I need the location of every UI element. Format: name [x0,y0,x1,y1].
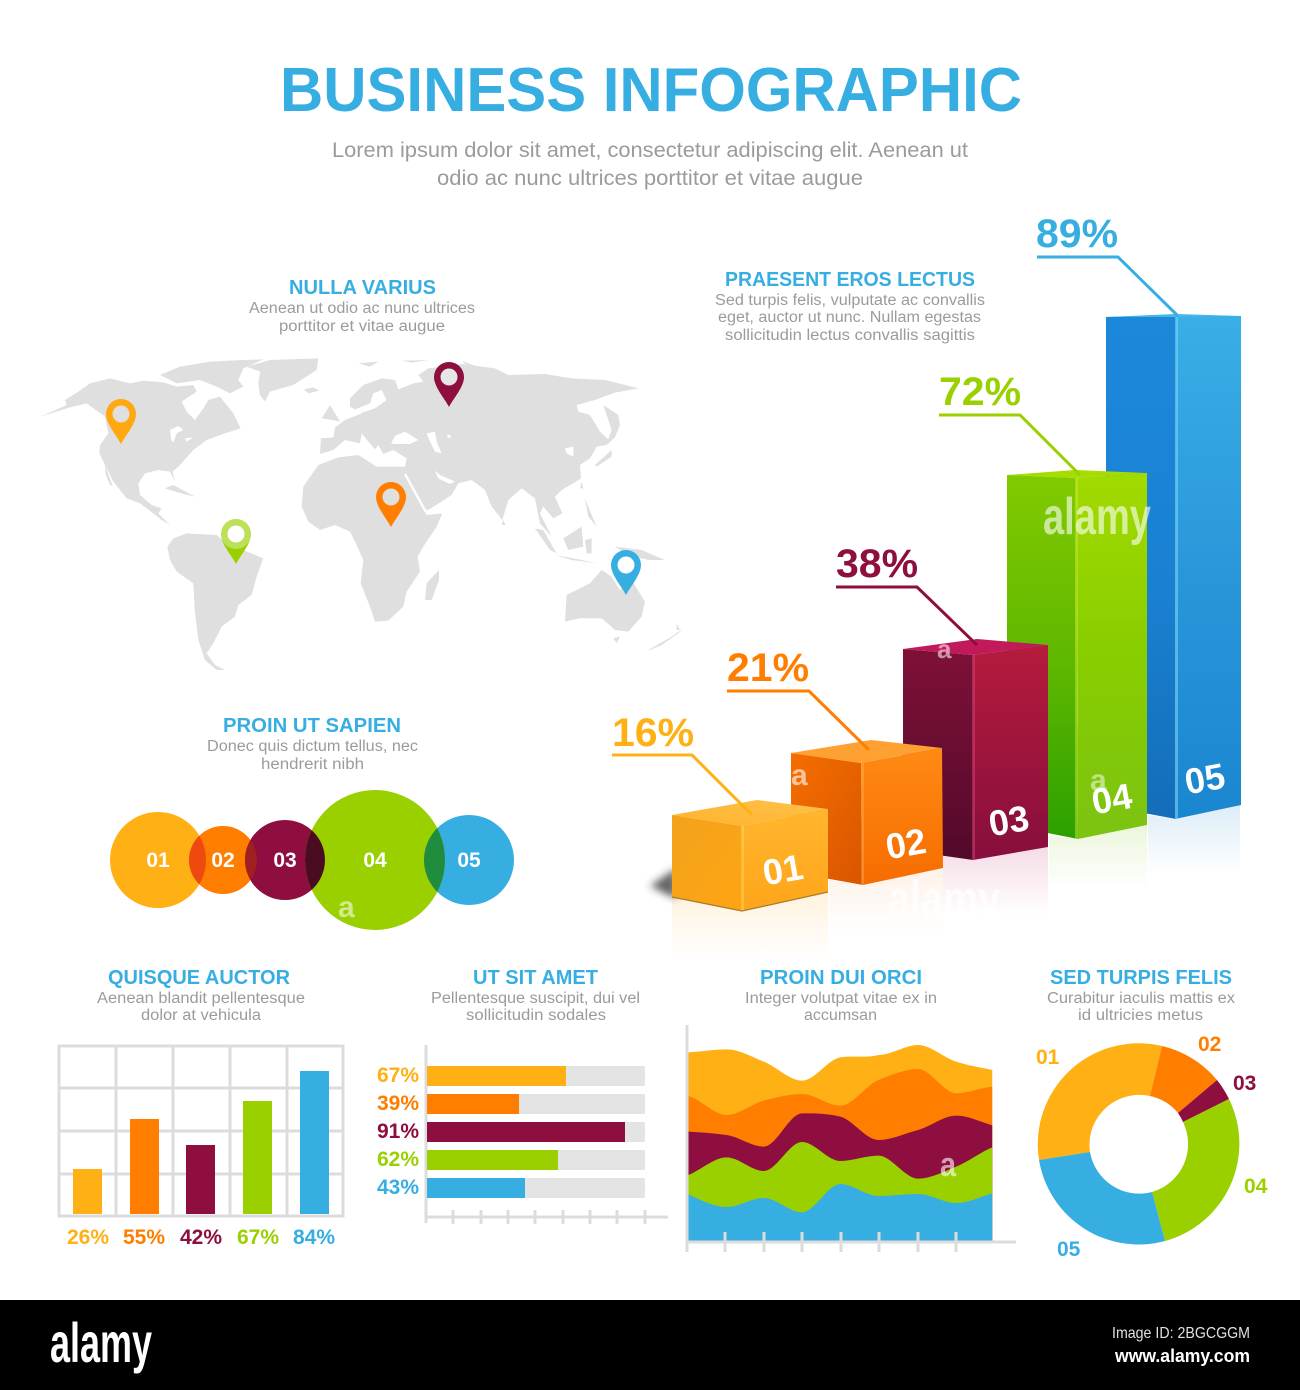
circle chart: 02 [211,849,235,872]
watermarks: a [338,891,355,924]
callout: 21%: 21% [727,646,809,690]
callout: 38% [836,542,977,645]
title: BUSINESS INFOGRAPHIC [280,56,1022,125]
horizontal bar chart: 91% [377,1120,419,1143]
3D bar 01 [672,800,828,911]
world map [41,358,683,670]
subtitle: odio ac nunc ultrices porttitor et vitae augue [437,166,863,190]
3D bar 03 [903,639,1048,860]
text block: stream chart description: accumsan [804,1007,877,1024]
text block: chart description: Sed turpis felis, vulputate ac convallis [715,292,985,309]
circle chart: 03 [273,849,297,872]
donut chart: 03 [1233,1072,1256,1095]
donut chart: 02 [1198,1033,1221,1056]
icon: blue map pin [611,550,641,595]
horizontal bar chart [377,1045,668,1224]
circle chart: 05 [457,849,481,872]
text block: circles description: hendrerit nibh [261,756,364,773]
bar reflections [672,805,1240,960]
circle chart [110,790,514,930]
text block: chart description [715,292,985,344]
footer url: www.alamy.com [1114,1346,1250,1366]
text block: map description: Aenean ut odio ac nunc ultrices [249,300,475,317]
circle chart: 01 [146,849,170,872]
stream area chart [687,1025,1016,1252]
callout: 16%: 16% [612,711,694,755]
text block: donut description: id ultricies metus [1078,1007,1203,1024]
text block: stream chart description: Integer volutpat vitae ex in [745,990,937,1007]
callout: 38%: 38% [836,542,918,586]
heading: praesent eros lectus: PRAESENT EROS LECTUS [725,269,975,291]
callout: 89%: 89% [1036,212,1118,256]
column chart: 42% [180,1226,222,1249]
horizontal bar chart: 43% [377,1176,419,1199]
footer bar [0,1300,1300,1390]
panel: world map [41,277,683,670]
text block: horizontal bars description: sollicitudin sodales [466,1007,606,1024]
heading: nulla varius: NULLA VARIUS [289,277,436,299]
3D bar 02 [791,740,943,885]
subtitle: Lorem ipsum dolor sit amet, consectetur adipiscing elit. Aenean ut [332,138,968,162]
text block: column chart description [97,990,305,1024]
text block: horizontal bars description [431,990,640,1024]
horizontal bar chart: 62% [377,1148,419,1171]
3D bar 05 [1106,314,1241,819]
panel: column chart [59,967,343,1249]
circle chart: 04 [363,849,387,872]
panel: 3D bar chart [612,212,1241,960]
heading: sed turpis felis: SED TURPIS FELIS [1050,967,1232,989]
heading: ut sit amet: UT SIT AMET [473,967,598,989]
text block: map description: porttitor et vitae augue [279,318,445,335]
heading: proin ut sapien: PROIN UT SAPIEN [223,715,401,737]
column chart: 55% [123,1226,165,1249]
text block: column chart description: dolor at vehicula [141,1007,261,1024]
icon: orange map pin [376,482,406,527]
icon: green map pin [221,519,251,564]
callout: 72%: 72% [939,370,1021,414]
callout: 89% [1036,212,1178,316]
bar number labels: 05 [1182,755,1228,802]
subtitle [332,138,968,190]
bar number labels: 01 [760,846,806,893]
text block: chart description: eget, auctor ut nunc. Nullam egestas [718,309,981,326]
callout: 16% [612,711,752,815]
panel: horizontal bars [377,967,668,1224]
bar number labels [760,755,1228,893]
bar number labels: 02 [883,820,929,867]
watermarks: a [937,634,952,664]
watermarks [338,488,1151,1184]
watermarks: a [791,759,808,792]
donut chart: 05 [1057,1238,1081,1261]
horizontal bar chart: 67% [377,1064,419,1087]
text block: circles description: Donec quis dictum tellus, nec [207,738,418,755]
heading: proin dui orci: PROIN DUI ORCI [760,967,922,989]
reflection watermark: alamy [888,871,1000,927]
panel: overlapping circles [110,715,514,930]
text block: circles description [207,738,418,773]
watermarks: a [940,1146,957,1184]
column chart: 84% [293,1226,335,1249]
horizontal bar chart: 39% [377,1092,419,1115]
column chart [59,1046,343,1249]
watermarks: a [1090,764,1107,797]
donut chart [1036,1033,1268,1261]
3D bar 04 [1007,470,1147,839]
donut chart: 04 [1244,1175,1268,1198]
panel: stream chart [687,967,1016,1252]
watermarks: alamy [1043,488,1151,546]
text block: map description [249,300,475,335]
text block: chart description: sollicitudin lectus convallis sagittis [725,327,975,344]
text block: horizontal bars description: Pellentesque suscipit, dui vel [431,990,640,1007]
donut chart: 01 [1036,1046,1060,1069]
heading: quisque auctor: QUISQUE AUCTOR [108,967,291,989]
text block: donut description: Curabitur iaculis mattis ex [1047,990,1235,1007]
text block: column chart description: Aenean blandit pellentesque [97,990,305,1007]
icon: maroon map pin [434,362,464,407]
column chart: 26% [67,1226,109,1249]
callout: 21% [727,646,869,750]
callout: 72% [939,370,1080,475]
icon: yellow map pin [106,399,136,444]
text block: donut description [1047,990,1235,1024]
footer logo: alamy [50,1311,152,1374]
column chart: 67% [237,1226,279,1249]
text block: stream chart description [745,990,937,1024]
bar number labels: 03 [986,797,1032,844]
footer image id: Image ID: 2BGCGGM [1112,1325,1250,1342]
panel: donut chart [1036,967,1268,1261]
bar number labels: 04 [1089,775,1135,822]
bar shadow [650,868,676,899]
